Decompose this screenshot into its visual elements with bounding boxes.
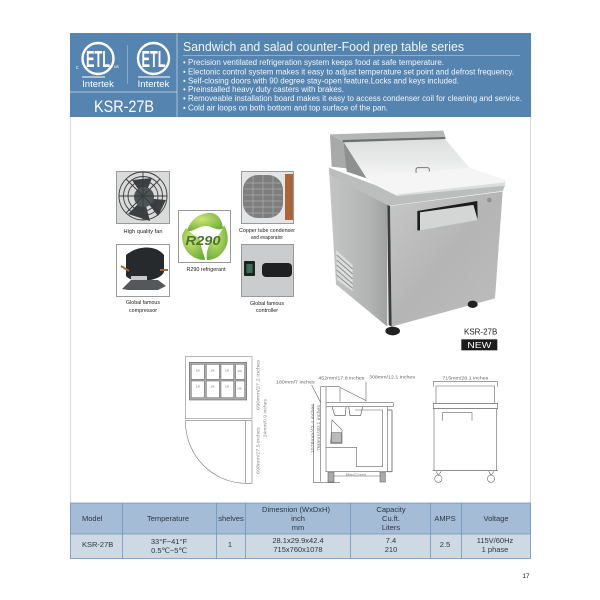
icon: ETL US certification mark: ETL — [86, 46, 110, 72]
technical drawing: front view: 715mm/28.1 inches — [442, 375, 489, 380]
casters — [385, 327, 400, 335]
door swing — [185, 421, 252, 483]
door handle — [417, 201, 478, 230]
caption: controller: Global famous — [250, 301, 284, 307]
feature list: • Electonic control system makes it easy to adjust temperature set point and defrost frequency. — [183, 68, 514, 76]
feature list: • Cold air loops on both bottom and top surface of the pan. — [183, 104, 388, 112]
table header row: inch — [291, 514, 305, 523]
caption: high quality fan: High quality fan — [124, 229, 162, 235]
technical drawing: side view: 452mm/17.8 inches — [318, 375, 365, 380]
technical drawing: top view — [185, 357, 268, 483]
technical drawing: front view — [433, 375, 498, 482]
feature list — [183, 58, 522, 112]
icon: ETL sanitation mark: ETL — [142, 46, 166, 72]
panel: header banner — [70, 33, 531, 117]
side panel — [329, 175, 387, 327]
vent — [336, 250, 353, 291]
caption: compressor — [126, 300, 160, 314]
pan layout: 1/6 — [210, 384, 215, 388]
pan layout: 1/6 — [210, 368, 215, 372]
product photo: prep table — [329, 131, 506, 350]
dimension labels — [255, 359, 268, 474]
table data row: KSR-27B — [82, 540, 113, 549]
heading: Sandwich and salad counter-Food prep table series — [183, 39, 464, 54]
cutting board — [367, 168, 506, 197]
icon: ETL sanitation mark: Intertek — [138, 79, 170, 90]
icon: copper tube condenser — [242, 172, 294, 224]
icon: controller — [242, 244, 294, 296]
caption: compressor: compressor — [129, 308, 157, 314]
icon: high quality fan — [116, 172, 170, 224]
technical drawing: side view: 180mm/7 inches — [276, 379, 315, 384]
table data row — [82, 536, 514, 555]
icon: compressor — [116, 244, 170, 296]
panel: component photos — [116, 172, 295, 314]
model name: KSR-27B — [94, 98, 154, 116]
caption: condenser: Copper tube condenser — [239, 228, 295, 234]
pan layout: 1/9 — [237, 386, 242, 390]
table data row: 7.4 — [386, 536, 396, 545]
caption: R290 refrigerant: R290 refrigerant — [186, 267, 226, 273]
dimension labels: 690mm/27.2 inches — [255, 359, 260, 410]
table header row: Model — [82, 514, 103, 523]
door — [390, 192, 503, 327]
dimension labels: 24mm/0.9 inches — [263, 398, 268, 437]
table data row: 1 phase — [482, 545, 508, 554]
table header row: Dimesnion (WxDxH) — [262, 505, 330, 514]
spec table — [70, 503, 531, 559]
NEW badge — [461, 339, 497, 350]
pan layout: 1/6 — [225, 369, 229, 373]
technical drawing: side view: 760mm/30.1 inches — [316, 404, 321, 451]
table header row: mm — [292, 523, 304, 532]
table header row: Liters — [382, 523, 400, 532]
caption: controller: controller — [256, 308, 278, 314]
pan layout — [189, 362, 247, 400]
table data row: 2.5 — [440, 540, 450, 549]
caption: controller — [250, 301, 284, 314]
table header row: Cu.ft. — [382, 514, 400, 523]
table header row: Temperature — [147, 514, 189, 523]
icon: ETL US certification mark: us — [114, 64, 120, 69]
table header row: shelves — [218, 514, 244, 523]
table data row: 0.5℃~5℃ — [151, 546, 187, 555]
technical drawing: side view: 308mm/12.1 inches — [369, 375, 416, 380]
icon: ETL US certification mark — [76, 43, 120, 90]
pan layout: 1/6 — [225, 384, 229, 388]
pan layout: 1/6 — [196, 384, 200, 388]
icon: ETL US certification mark: Intertek — [82, 79, 114, 90]
table data row: 28.1x29.9x42.4 — [272, 536, 324, 545]
feature list: • Self-closing doors with 90 degree stay-open feature.Locks and keys included. — [183, 76, 459, 86]
feature list: • Precision ventilated refrigeration system keeps food at safe temperature. — [183, 58, 444, 67]
icon: ETL US certification mark: c — [76, 65, 79, 71]
caption: condenser — [239, 228, 295, 241]
pan layout: 1/6 — [238, 369, 242, 373]
rail — [329, 168, 505, 206]
caption: condenser: and evaporator — [251, 235, 283, 241]
page number: 17 — [522, 573, 530, 580]
NEW badge: NEW — [467, 340, 492, 350]
icon: ETL sanitation mark — [138, 43, 170, 90]
table data row: 1 — [228, 540, 232, 549]
feature list: • Removeable installation board makes it easy to access condenser coil for cleaning and service. — [183, 94, 522, 103]
table data row: 715x760x1078 — [273, 545, 323, 554]
table header row: Capacity — [376, 505, 406, 514]
table header row: Voltage — [483, 514, 509, 523]
product label: KSR-27B — [464, 327, 497, 336]
table data row: 115V/60Hz — [477, 536, 514, 545]
table data row: 210 — [385, 545, 397, 554]
table data row: 33°F~41°F — [151, 537, 188, 546]
icon: R290 refrigerant: R290 — [186, 233, 221, 248]
table header row — [82, 505, 509, 532]
technical drawing: side view — [276, 375, 416, 483]
caption: compressor: Global famous — [126, 300, 160, 306]
pan layout: 1/6 — [196, 369, 200, 373]
feature list: • Preinstalled heavy duty casters with brakes. — [183, 85, 344, 94]
icon: R290 refrigerant — [178, 210, 230, 262]
page frame — [70, 34, 530, 504]
dimension labels: 698mm/27.5 inches — [255, 427, 260, 474]
lid rear panel — [330, 134, 347, 168]
technical drawing: side view: 690mm/27.2 inches — [346, 474, 367, 476]
technical drawing: side view: 1078mm/42.4 inches — [310, 403, 315, 453]
table header row: AMPS — [434, 514, 456, 523]
